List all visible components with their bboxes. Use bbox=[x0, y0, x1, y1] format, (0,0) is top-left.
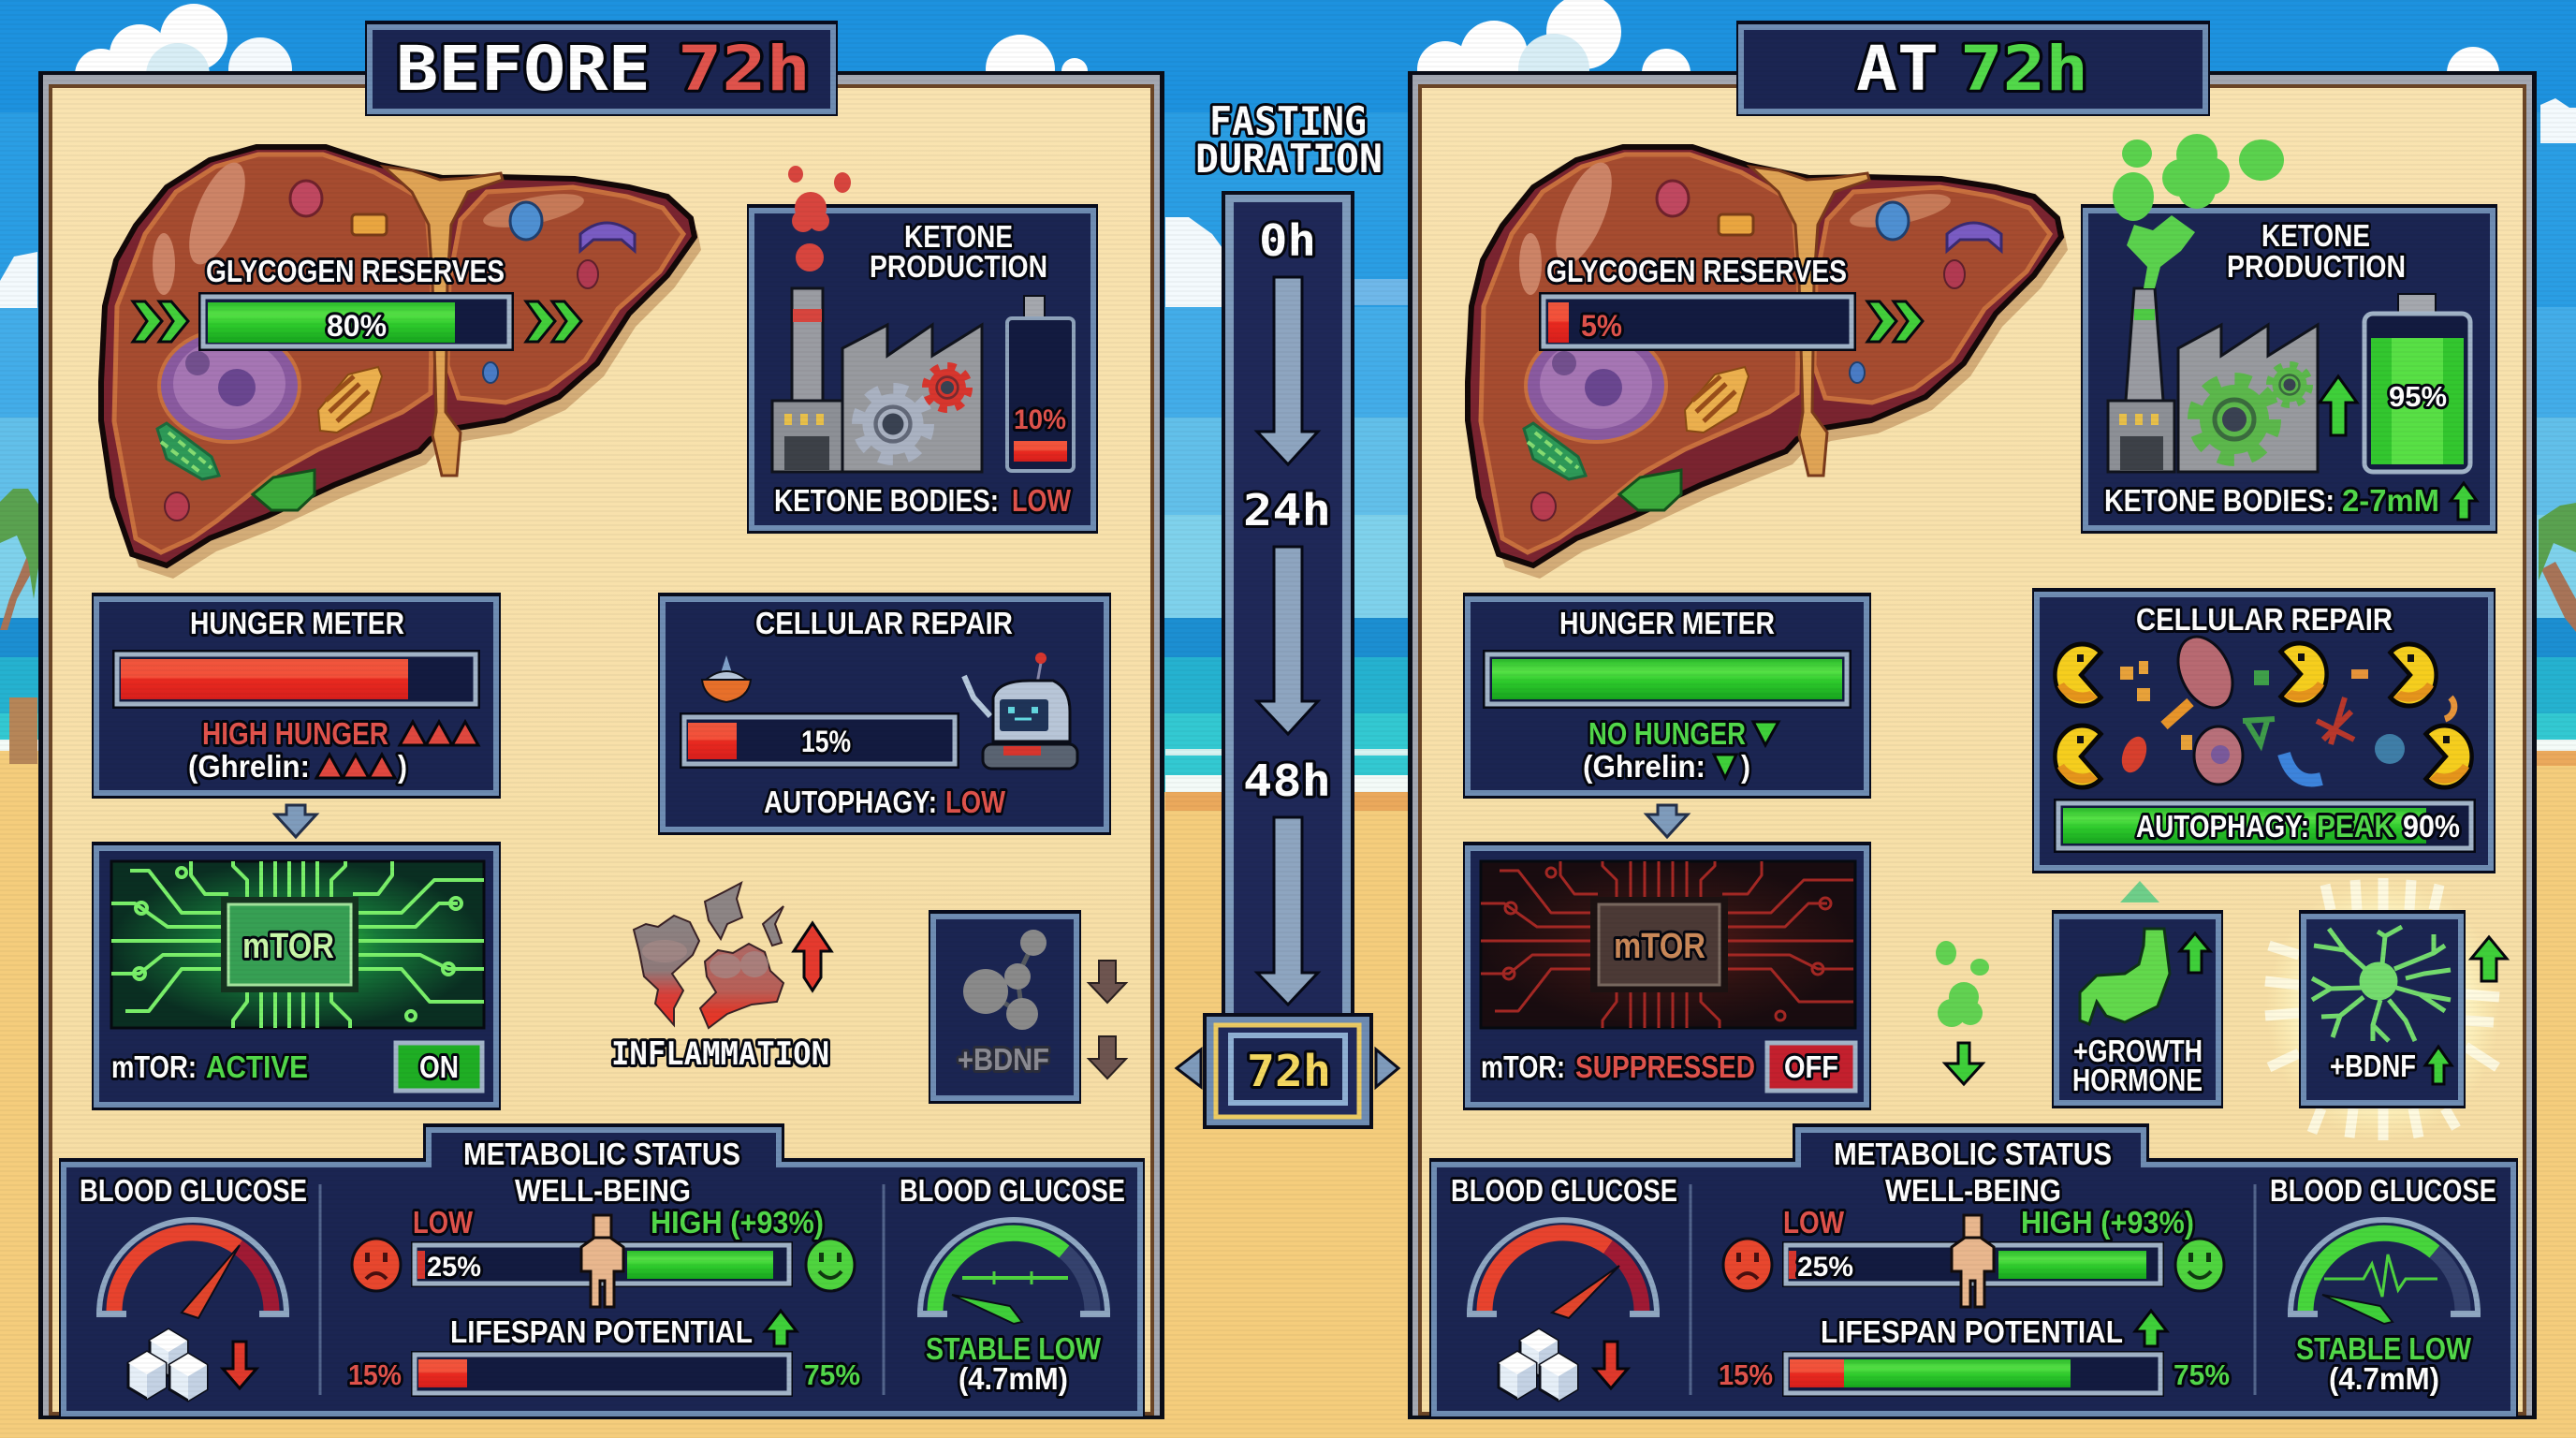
lifespan potential bbox=[1719, 1311, 2230, 1397]
dim circuit board screen: mTOR bbox=[1614, 927, 1705, 966]
inflammation gone: green wisps bbox=[1936, 941, 1989, 1084]
panel: hunger meter: NO HUNGER bbox=[1588, 716, 1746, 751]
ketone battery 10% bbox=[1007, 296, 1074, 471]
icon: repair robot bbox=[964, 653, 1077, 769]
panel: mTOR active: ACTIVE bbox=[206, 1049, 308, 1084]
decoration: left palm bbox=[0, 489, 39, 764]
title: before 72h bbox=[365, 21, 838, 116]
well-being meter: 25% bbox=[427, 1252, 481, 1283]
panel: cellular repair peak: AUTOPHAGY: bbox=[2136, 809, 2309, 844]
panel: cellular repair peak bbox=[2032, 588, 2496, 873]
dim circuit board screen bbox=[1481, 861, 1855, 1028]
decoration: right palm bbox=[2539, 503, 2576, 632]
title: at 72h: 72h bbox=[1960, 33, 2088, 105]
icon: person bbox=[1952, 1215, 1994, 1307]
panel: hunger meter: (Ghrelin: bbox=[188, 749, 310, 784]
title: at 72h: AT bbox=[1856, 33, 1939, 105]
blood glucose stable gauge bbox=[900, 1173, 1125, 1396]
blood glucose high gauge bbox=[80, 1173, 307, 1318]
timeline column: 48h bbox=[1243, 756, 1331, 806]
well-being meter: HIGH (+93%) bbox=[2021, 1205, 2194, 1240]
well-being meter: WELL-BEING bbox=[1885, 1173, 2061, 1208]
inflammation smoke bbox=[611, 883, 831, 1073]
icon: bowl bbox=[702, 655, 751, 702]
ketone battery 10%: 10% bbox=[1014, 404, 1066, 435]
liver illustration bbox=[1468, 147, 2068, 579]
panel: before 72h bbox=[38, 21, 1164, 1419]
blood glucose high gauge bbox=[1451, 1173, 1677, 1318]
panel: cellular repair bbox=[658, 593, 1111, 835]
icon: molecule bbox=[963, 930, 1046, 1030]
ON switch: ON bbox=[419, 1049, 459, 1084]
blood glucose high gauge: BLOOD GLUCOSE bbox=[80, 1173, 307, 1208]
timeline column: 24h bbox=[1243, 485, 1331, 536]
title: at 72h bbox=[1736, 21, 2210, 116]
well-being meter: LOW bbox=[413, 1205, 474, 1240]
icon: neuron bbox=[2312, 927, 2451, 1041]
title: before 72h: 72h bbox=[678, 33, 811, 105]
panel: ketone production: KETONE BODIES: bbox=[2104, 483, 2334, 518]
72h selector: 72h bbox=[1247, 1046, 1331, 1096]
icon: sugar cubes with down arrow bbox=[128, 1329, 256, 1401]
blood glucose stable gauge: (4.7mM) bbox=[2329, 1361, 2439, 1396]
ON switch bbox=[396, 1043, 482, 1091]
icon: sugar cubes with down arrow bbox=[1499, 1329, 1628, 1401]
title: before 72h: BEFORE bbox=[396, 33, 651, 105]
heading: fasting duration: DURATION bbox=[1195, 136, 1383, 182]
panel: hunger meter bbox=[1463, 593, 1871, 799]
panel: hunger meter: (Ghrelin: bbox=[1583, 749, 1705, 784]
icon: person bbox=[581, 1215, 623, 1307]
arrow: hunger to mTOR bbox=[275, 805, 316, 837]
OFF switch: OFF bbox=[1784, 1049, 1838, 1084]
pac-man autophagy scene bbox=[2055, 628, 2472, 787]
panel: metabolic status bbox=[1429, 1123, 2518, 1419]
well-being meter: 25% bbox=[1797, 1252, 1853, 1283]
circuit board screen bbox=[111, 861, 484, 1028]
panel: growth hormone bbox=[2052, 910, 2223, 1108]
panel: ketone production: LOW bbox=[1012, 483, 1072, 518]
panel: metabolic status bbox=[59, 1123, 1145, 1419]
panel: cellular repair: CELLULAR REPAIR bbox=[755, 606, 1013, 640]
panel: cellular repair peak: 90% bbox=[2403, 809, 2460, 844]
ketone battery 95%: 95% bbox=[2389, 380, 2447, 413]
liver illustration bbox=[101, 147, 701, 579]
panel: hunger meter: HUNGER METER bbox=[1559, 606, 1775, 640]
icon: glowing stomach bbox=[2080, 929, 2170, 1024]
arrows: BDNF decreasing bbox=[1089, 961, 1126, 1078]
panel: hunger meter: HUNGER METER bbox=[190, 606, 404, 640]
panel: ketone production bbox=[2081, 134, 2497, 534]
factory with chimney bbox=[2108, 288, 2318, 472]
lifespan potential: LIFESPAN POTENTIAL bbox=[1821, 1314, 2123, 1349]
glycogen reserves meter bbox=[133, 254, 581, 351]
timeline column bbox=[1177, 191, 1398, 1127]
panel: ketone production: KETONE bbox=[2261, 218, 2370, 253]
blood glucose stable gauge: BLOOD GLUCOSE bbox=[900, 1173, 1125, 1208]
panel: ketone production: PRODUCTION bbox=[2227, 249, 2406, 284]
inflammation smoke: INFLAMMATION bbox=[611, 1035, 829, 1073]
glycogen reserves meter: GLYCOGEN RESERVES bbox=[206, 254, 505, 288]
panel: growth hormone: HORMONE bbox=[2072, 1063, 2203, 1097]
panel: cellular repair peak: CELLULAR REPAIR bbox=[2136, 602, 2393, 637]
panel: hunger meter: ) bbox=[398, 749, 407, 784]
panel: ketone production: PRODUCTION bbox=[870, 249, 1047, 284]
lifespan potential: 75% bbox=[2174, 1358, 2230, 1391]
panel: ketone production: 2-7mM bbox=[2342, 483, 2439, 518]
panel: metabolic status: METABOLIC STATUS bbox=[463, 1137, 740, 1171]
green smoke bbox=[2113, 134, 2284, 288]
panel: metabolic status: METABOLIC STATUS bbox=[1834, 1137, 2112, 1171]
panel: cellular repair: LOW bbox=[945, 785, 1006, 819]
lifespan potential: 75% bbox=[804, 1358, 860, 1391]
panel: BDNF high: +BDNF bbox=[2330, 1049, 2416, 1083]
arrow: BDNF increasing bbox=[2471, 937, 2507, 981]
panel: BDNF high bbox=[2299, 910, 2466, 1108]
well-being meter bbox=[352, 1173, 855, 1307]
factory with chimney bbox=[772, 288, 982, 472]
glycogen reserves meter: 80% bbox=[327, 309, 387, 343]
lifespan potential bbox=[348, 1311, 860, 1397]
panel: cellular repair peak: PEAK bbox=[2317, 809, 2394, 844]
panel: mTOR suppressed: mTOR: bbox=[1481, 1049, 1565, 1084]
red smoke bbox=[788, 166, 851, 271]
up arrow bbox=[2320, 376, 2357, 435]
panel: ketone production: KETONE BODIES: bbox=[774, 483, 999, 518]
blood glucose stable gauge: (4.7mM) bbox=[959, 1361, 1068, 1396]
well-being meter: LOW bbox=[1783, 1205, 1845, 1240]
panel: cellular repair: 15% bbox=[801, 725, 851, 758]
panel: growth hormone: +GROWTH bbox=[2073, 1034, 2203, 1068]
well-being meter: HIGH (+93%) bbox=[651, 1205, 824, 1240]
glycogen reserves meter bbox=[1539, 254, 1923, 351]
glycogen reserves meter: 5% bbox=[1581, 309, 1622, 343]
panel: mTOR suppressed bbox=[1463, 842, 1871, 1110]
ketone battery 95% bbox=[2364, 294, 2470, 472]
panel: ketone production bbox=[747, 166, 1098, 534]
icon: sad face bbox=[1723, 1239, 1772, 1291]
panel: hunger meter: ) bbox=[1741, 749, 1750, 784]
lifespan potential: 15% bbox=[1719, 1358, 1773, 1391]
panel: mTOR active: mTOR: bbox=[111, 1049, 197, 1084]
timeline column: 0h bbox=[1259, 215, 1316, 266]
panel: cellular repair: AUTOPHAGY: bbox=[764, 785, 937, 819]
lifespan potential: 15% bbox=[348, 1358, 402, 1391]
heading: fasting duration: FASTING bbox=[1209, 98, 1367, 144]
panel: hunger meter: HIGH HUNGER bbox=[202, 716, 388, 751]
glycogen reserves meter: GLYCOGEN RESERVES bbox=[1546, 254, 1847, 288]
panel: hunger meter bbox=[92, 593, 501, 799]
panel: at 72h bbox=[1408, 21, 2537, 1419]
blood glucose high gauge: BLOOD GLUCOSE bbox=[1451, 1173, 1677, 1208]
well-being meter bbox=[1723, 1173, 2224, 1307]
icon: happy face bbox=[2175, 1239, 2224, 1291]
blood glucose stable gauge: STABLE LOW bbox=[926, 1331, 1102, 1366]
blood glucose stable gauge: STABLE LOW bbox=[2296, 1331, 2472, 1366]
blood glucose stable gauge bbox=[2270, 1173, 2496, 1396]
panel: BDNF low bbox=[929, 910, 1081, 1104]
panel: mTOR suppressed: SUPPRESSED bbox=[1575, 1049, 1755, 1084]
arrow: 48h to 72h bbox=[1257, 817, 1318, 1005]
heading: fasting duration bbox=[1195, 98, 1383, 182]
icon: happy face bbox=[806, 1239, 855, 1291]
panel: BDNF low: +BDNF bbox=[958, 1042, 1049, 1077]
lifespan potential: LIFESPAN POTENTIAL bbox=[450, 1314, 753, 1349]
arrow: 24h to 48h bbox=[1257, 547, 1318, 734]
glow behind BDNF bbox=[2265, 878, 2500, 1140]
small green indicator bbox=[2120, 881, 2159, 902]
panel: mTOR active bbox=[92, 842, 501, 1110]
arrow: hunger to mTOR bbox=[1647, 805, 1688, 837]
icon: sad face bbox=[352, 1239, 401, 1291]
circuit board screen: mTOR bbox=[242, 927, 334, 966]
panel: ketone production: KETONE bbox=[904, 219, 1013, 254]
well-being meter: WELL-BEING bbox=[515, 1173, 691, 1208]
blood glucose stable gauge: BLOOD GLUCOSE bbox=[2270, 1173, 2496, 1208]
72h selector bbox=[1177, 1015, 1398, 1127]
OFF switch bbox=[1767, 1043, 1855, 1091]
arrow: 0h to 24h bbox=[1257, 277, 1318, 464]
